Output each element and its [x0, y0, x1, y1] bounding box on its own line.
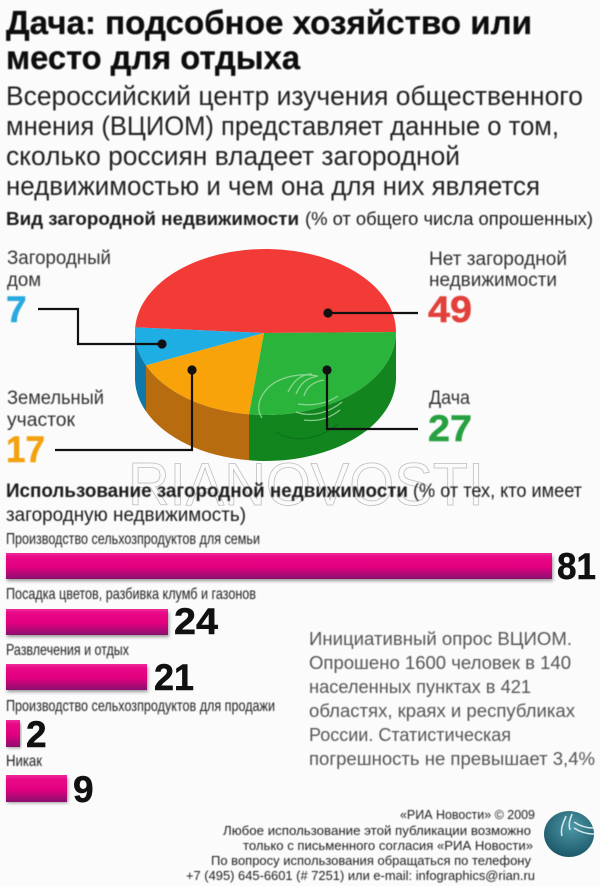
bar: family produce: Производство сельхозпродуктов для семьи: [6, 531, 260, 548]
bar: produce for sale: 2: [26, 714, 47, 755]
heading: property use: Использование загородной недвижимости: [6, 481, 408, 502]
footer credits: Любое использование этой публикации возможно: [223, 823, 531, 838]
bar: leisure: [6, 642, 194, 698]
intro text: недвижимостью и чем она для них является: [6, 171, 540, 201]
bar: leisure: 21: [154, 657, 194, 698]
bar: leisure: Развлечения и отдых: [6, 642, 129, 659]
leader lines: [38, 309, 418, 450]
survey note: [309, 628, 595, 769]
side: orange: [146, 365, 249, 460]
heading: property type: Вид загородной недвижимости: [6, 209, 299, 229]
survey note: России. Статистическая: [309, 724, 511, 745]
label: land plot: Земельный: [7, 388, 104, 409]
side: blue: [135, 332, 146, 411]
footer credits: [186, 807, 535, 883]
label: dacha: Дача: [429, 388, 470, 409]
survey note: Опрошено 1600 человек в 140: [309, 652, 571, 673]
intro text: мнения (ВЦИОМ) представляет данные о том,: [6, 111, 559, 141]
slice: dacha: [249, 332, 396, 415]
bar: flowers: Посадка цветов, разбивка клумб и газонов: [6, 586, 256, 603]
title: Дача: подсобное хозяйство или: [6, 4, 532, 41]
heading: property type: [6, 209, 593, 229]
bar: family produce: 81: [557, 546, 596, 587]
label: no property: недвижимости: [429, 270, 557, 291]
label: land plot: [6, 388, 104, 470]
pie chart: [135, 249, 396, 461]
watermark text: RIANOVOSTI: [128, 451, 484, 518]
label: house: Загородный: [7, 248, 111, 269]
label: land plot: участок: [7, 410, 76, 431]
title: [6, 4, 532, 76]
footer credits: +7 (495) 645-6601 (# 7251) или e-mail: infographics@rian.ru: [186, 868, 535, 883]
bar: produce for sale: Производство сельхозпродуктов для продажи: [6, 698, 275, 715]
heading: property use: [6, 481, 582, 526]
label: dacha: 27: [428, 408, 472, 449]
footer credits: По вопросу использования обращаться по телефону: [211, 853, 531, 868]
bar: flowers: 24: [174, 601, 218, 642]
bar: no use: Никак: [6, 753, 43, 770]
side: green: [249, 332, 396, 461]
bar: produce for sale: [6, 698, 275, 755]
watermark logo: [259, 374, 342, 439]
label: dacha: [428, 388, 472, 449]
icon: RIA Novosti logo: [544, 811, 594, 857]
bar: family produce: [6, 531, 596, 587]
footer credits: «РИА Новости» © 2009: [400, 807, 535, 822]
label: no property: [428, 249, 567, 330]
label: house: дом: [7, 270, 41, 291]
intro text: Всероссийский центр изучения общественного: [6, 81, 583, 111]
slice: house: [135, 327, 264, 365]
survey note: Инициативный опрос ВЦИОМ.: [309, 628, 572, 649]
heading: property type: (% от общего числа опрошенных): [305, 209, 593, 229]
label: house: [6, 248, 111, 330]
intro text: [6, 81, 583, 201]
label: no property: Нет загородной: [429, 249, 567, 270]
label: house: 7: [6, 289, 27, 330]
footer credits: только с письменного согласия «РИА Новости»: [243, 838, 533, 853]
title: место для отдыха: [6, 39, 301, 76]
label: no property: 49: [428, 289, 472, 330]
survey note: областях, краях и республиках: [309, 700, 576, 721]
bar: no use: [6, 753, 94, 810]
heading: property use: (% от тех, кто имеет: [413, 481, 582, 502]
bar: no use: 9: [73, 769, 94, 810]
bar chart: [6, 531, 596, 810]
intro text: сколько россиян владеет загородной: [6, 141, 460, 171]
slice: no property: [135, 249, 396, 333]
survey note: погрешность не превышает 3,4%: [309, 748, 595, 769]
label: land plot: 17: [6, 429, 45, 470]
heading: property use: загородную недвижимость): [6, 505, 246, 526]
leader dots: [157, 308, 333, 375]
survey note: населенных пунктах в 421: [309, 676, 531, 697]
bar: flowers: [6, 586, 256, 642]
slice: land plot: [146, 333, 264, 414]
